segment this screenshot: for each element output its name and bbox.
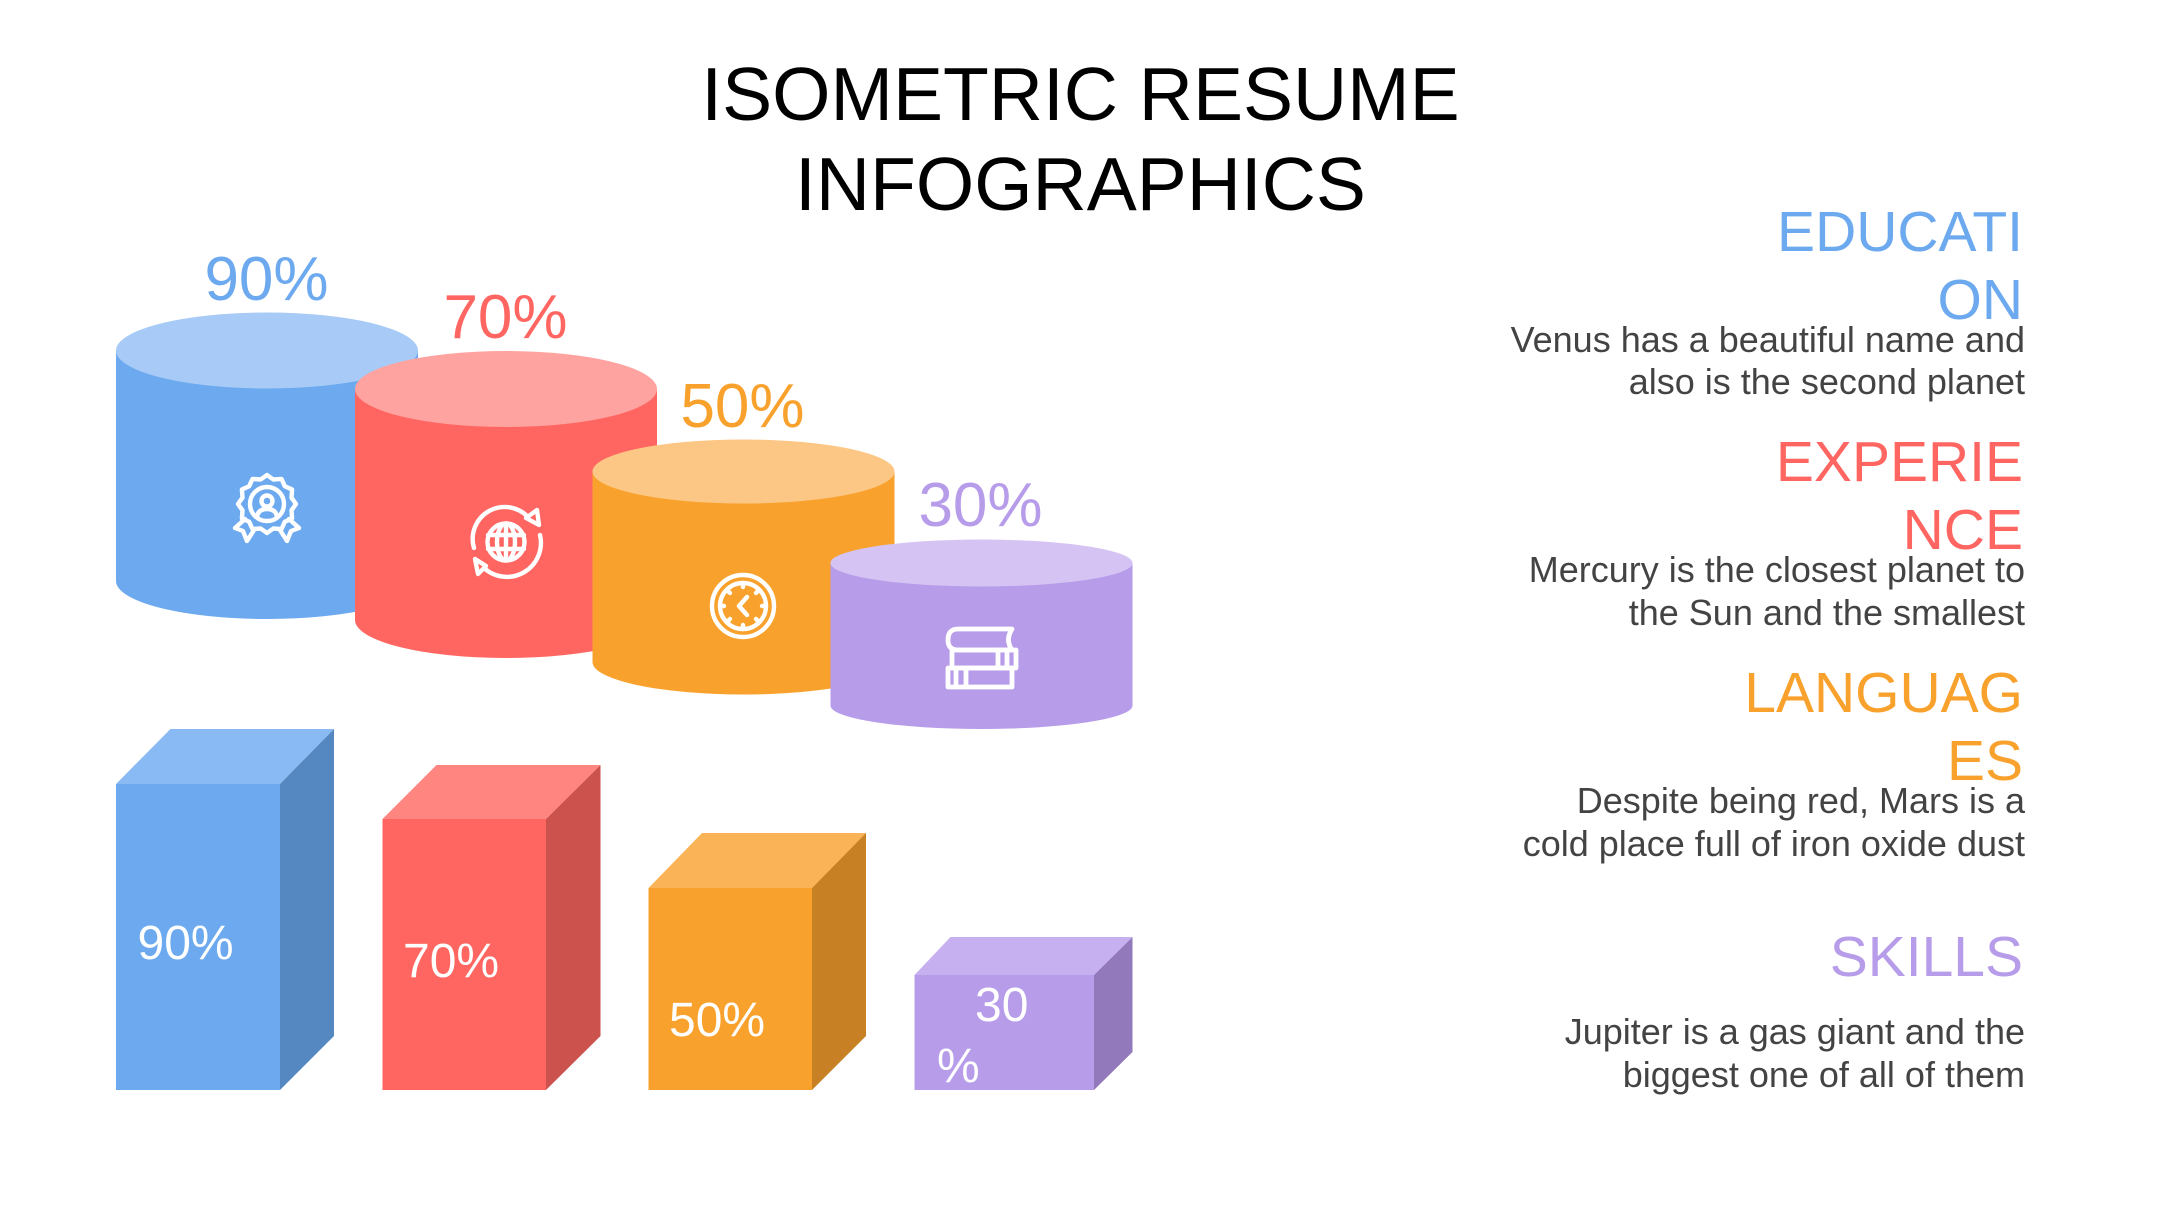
title (701, 52, 1460, 226)
legend item: experience (1529, 430, 2025, 633)
cylinder: skills 30% (830, 471, 1132, 729)
bar: 30%: 30 (975, 979, 1028, 1032)
cylinder chart (116, 245, 1132, 729)
title: ISOMETRIC RESUME (701, 52, 1460, 136)
cylinder: experience 70% (355, 283, 657, 658)
legend item: languages: ES (1947, 729, 2023, 793)
cylinder: languages 50% (592, 372, 894, 694)
legend item: languages: cold place full of iron oxide dust (1523, 823, 2025, 864)
cylinder: education 90%: 90% (204, 245, 329, 314)
bar: 70% (382, 765, 600, 1090)
legend item: skills: Jupiter is a gas giant and the (1565, 1011, 2025, 1052)
cylinder: languages 50%: 50% (680, 372, 805, 441)
legend item: skills (1565, 925, 2025, 1095)
legend item: languages: LANGUAG (1744, 661, 2023, 725)
legend item: experience: Mercury is the closest planet to (1529, 549, 2025, 590)
bar: 30% (914, 937, 1132, 1093)
bar: 50% (648, 833, 866, 1090)
legend item: experience: NCE (1903, 498, 2023, 562)
legend (1511, 200, 2026, 1095)
icon: award badge (235, 475, 299, 541)
cylinder: skills 30%: 30% (918, 471, 1043, 540)
legend item: experience: EXPERIE (1776, 430, 2023, 494)
legend item: education (1511, 200, 2025, 402)
bar: 90%: 90% (138, 917, 234, 970)
legend item: skills: SKILLS (1830, 925, 2023, 989)
legend item: education: Venus has a beautiful name and (1511, 319, 2025, 360)
legend item: skills: biggest one of all of them (1623, 1054, 2025, 1095)
icon: stack of books (948, 629, 1016, 687)
cylinder: experience 70%: 70% (443, 283, 568, 352)
icon: globe with arrows (473, 507, 541, 577)
legend item: education: also is the second planet (1629, 361, 2025, 402)
bar: 50%: 50% (669, 994, 765, 1047)
bar: 70%: 70% (403, 935, 499, 988)
icon: clock (712, 575, 774, 637)
cylinder: education 90% (116, 245, 418, 619)
legend item: languages (1523, 661, 2026, 864)
title: INFOGRAPHICS (795, 142, 1366, 226)
bar: 30%: % (937, 1040, 980, 1093)
legend item: languages: Despite being red, Mars is a (1577, 780, 2026, 821)
3D bar chart (116, 729, 1132, 1093)
legend item: education: EDUCATI (1777, 200, 2023, 264)
bar: 90% (116, 729, 334, 1090)
legend item: education: ON (1938, 268, 2023, 332)
legend item: experience: the Sun and the smallest (1629, 592, 2025, 633)
